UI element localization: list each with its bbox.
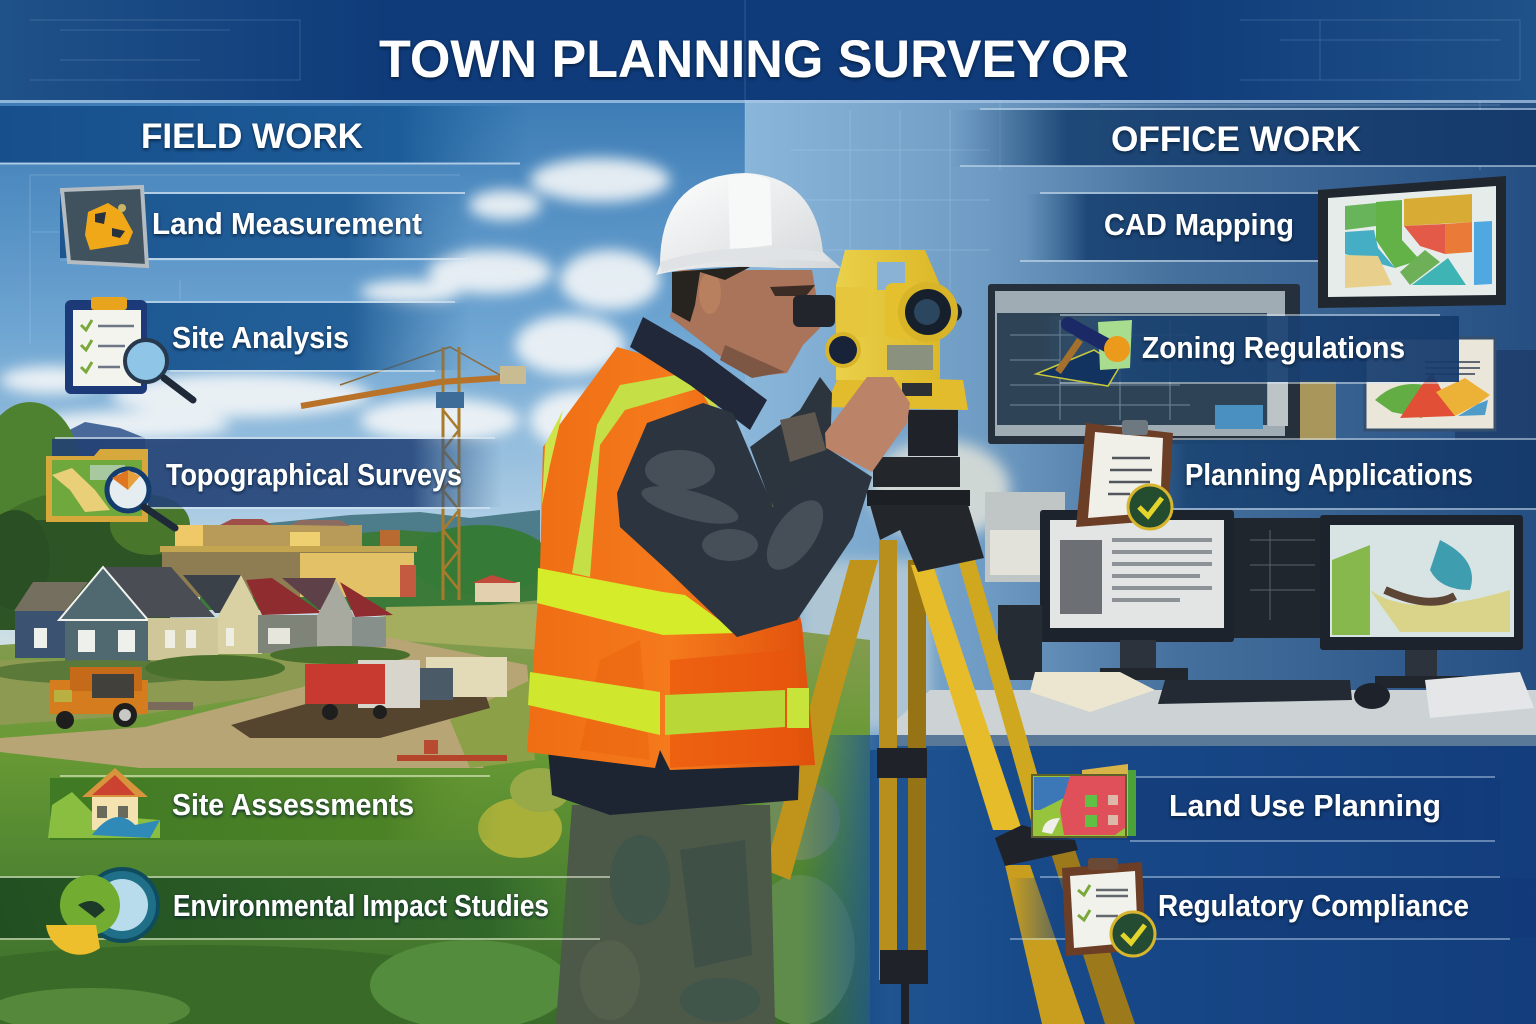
background: field scene sky <box>0 90 1536 750</box>
far field <box>386 604 540 650</box>
vest <box>527 347 815 770</box>
item: planning applications <box>1076 420 1536 529</box>
blue lower right background <box>800 735 1536 1024</box>
item: topographical surveys: Topographical Surveys <box>166 457 462 492</box>
item: land use planning <box>1030 764 1500 841</box>
instrument eyepiece <box>793 295 835 327</box>
item: site analysis: Site Analysis <box>172 320 349 355</box>
panel: office work <box>950 109 1536 956</box>
construction vehicles <box>50 657 507 761</box>
icon: checklist <box>1062 858 1155 956</box>
item: planning applications: Planning Applications <box>1185 457 1473 492</box>
item: regulatory compliance: Regulatory Compliance <box>1158 888 1469 923</box>
icon: land parcel <box>62 187 147 266</box>
houses <box>14 567 393 662</box>
item: site assessments: Site Assessments <box>172 787 414 822</box>
sleeve highlights <box>638 450 834 579</box>
item: land use planning: Land Use Planning <box>1169 788 1441 823</box>
dirt road <box>0 637 530 768</box>
icon: house on landscape <box>48 768 160 838</box>
item: site analysis <box>65 297 470 400</box>
total station instrument <box>825 250 968 410</box>
trousers <box>556 805 775 1024</box>
item: land measurement: Land Measurement <box>152 206 422 241</box>
trouser camo <box>580 835 760 1022</box>
title: TOWN PLANNING SURVEYOR <box>379 30 1129 89</box>
icon: globe <box>46 869 158 955</box>
item: topographical surveys <box>46 438 502 528</box>
panel: field work <box>0 106 612 955</box>
icon: map monitor <box>1318 176 1506 308</box>
heading: field work: FIELD WORK <box>141 117 363 156</box>
heading: field work <box>0 106 530 164</box>
hedges <box>0 646 410 684</box>
item: land measurement <box>60 187 470 266</box>
ground <box>0 600 870 1024</box>
heading: office work: OFFICE WORK <box>1111 120 1361 159</box>
icon: map with magnifier <box>46 449 175 528</box>
icon: gavel and zoning map <box>1036 320 1132 386</box>
clouds <box>0 158 670 450</box>
chart paper behind zoning band <box>1365 338 1495 430</box>
vest shoulder straps <box>572 373 700 577</box>
office monitors and desk <box>880 284 1536 746</box>
item: cad mapping: CAD Mapping <box>1104 207 1294 242</box>
item: regulatory compliance <box>1010 858 1536 956</box>
haze behind the tripod <box>800 440 1010 730</box>
item: environmental impact studies: Environmental Impact Studies <box>173 888 549 923</box>
heading: office work <box>950 109 1536 166</box>
item: zoning regulations: Zoning Regulations <box>1142 330 1405 365</box>
foreground plants <box>0 768 855 1024</box>
cargo pocket <box>680 840 752 968</box>
tripod <box>765 410 1135 1024</box>
item: environmental impact studies <box>0 869 612 955</box>
icon: land use map <box>1032 764 1136 837</box>
background building <box>985 492 1065 582</box>
item: zoning regulations <box>1036 315 1459 386</box>
hand <box>825 377 910 472</box>
surveyor figure <box>527 173 910 1024</box>
lower jacket <box>548 750 800 815</box>
rear sleeve <box>750 377 832 515</box>
icon: clipboard and magnifier <box>65 297 193 400</box>
crane <box>301 347 526 600</box>
trees <box>0 402 550 630</box>
apartment building <box>160 519 520 602</box>
vest reflective bands <box>537 568 737 635</box>
collar <box>630 317 767 430</box>
head <box>670 270 820 377</box>
title band <box>0 0 1536 103</box>
distant hills <box>50 422 540 610</box>
jacket sleeve <box>617 403 872 637</box>
icon: clipboard with check <box>1076 420 1173 529</box>
item: cad mapping <box>1020 176 1506 308</box>
hard hat <box>656 173 841 275</box>
item: site assessments <box>48 768 500 840</box>
